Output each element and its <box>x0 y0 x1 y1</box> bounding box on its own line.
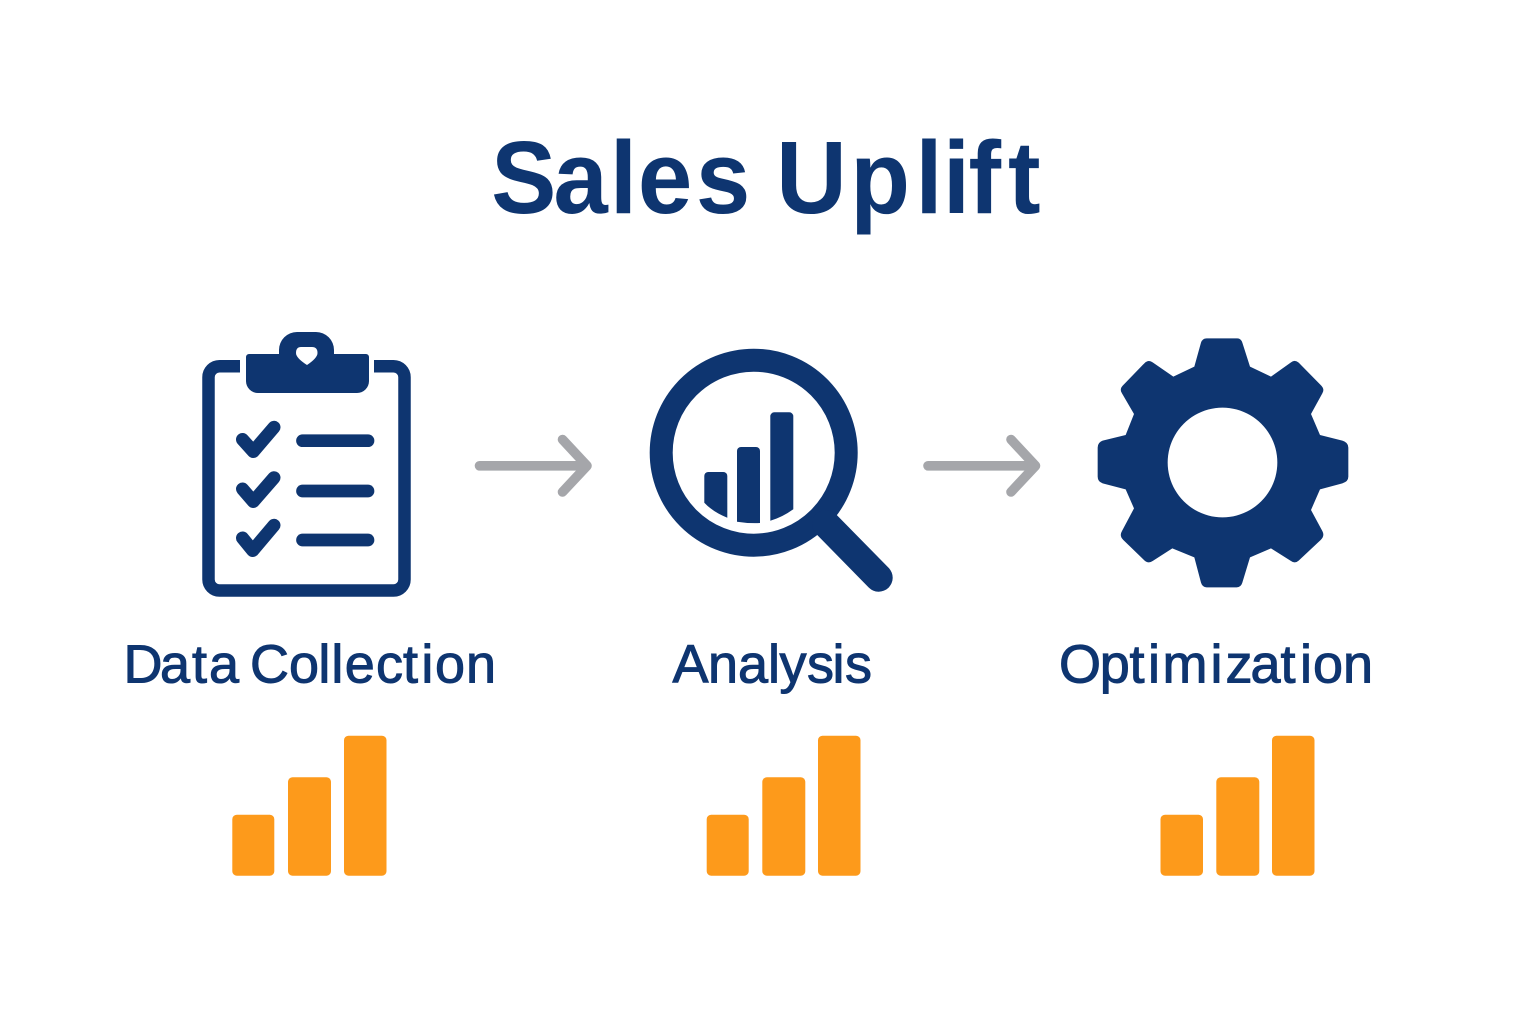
icon: clipboard checklist <box>208 332 404 590</box>
bar chart: optimization <box>1160 736 1314 876</box>
label: optimization: Optimization <box>1059 634 1373 694</box>
bar chart: analysis <box>707 736 860 876</box>
arrow: data collection to analysis <box>480 440 587 492</box>
title: Sales Uplift <box>491 121 1041 236</box>
label: analysis: Analysis <box>672 634 872 694</box>
icon: magnifier with bar chart <box>661 360 879 578</box>
label: data collection: Data Collection <box>124 634 496 694</box>
icon: gear <box>1098 338 1348 587</box>
arrow: analysis to optimization <box>928 440 1036 492</box>
bar chart: data collection <box>232 736 386 876</box>
